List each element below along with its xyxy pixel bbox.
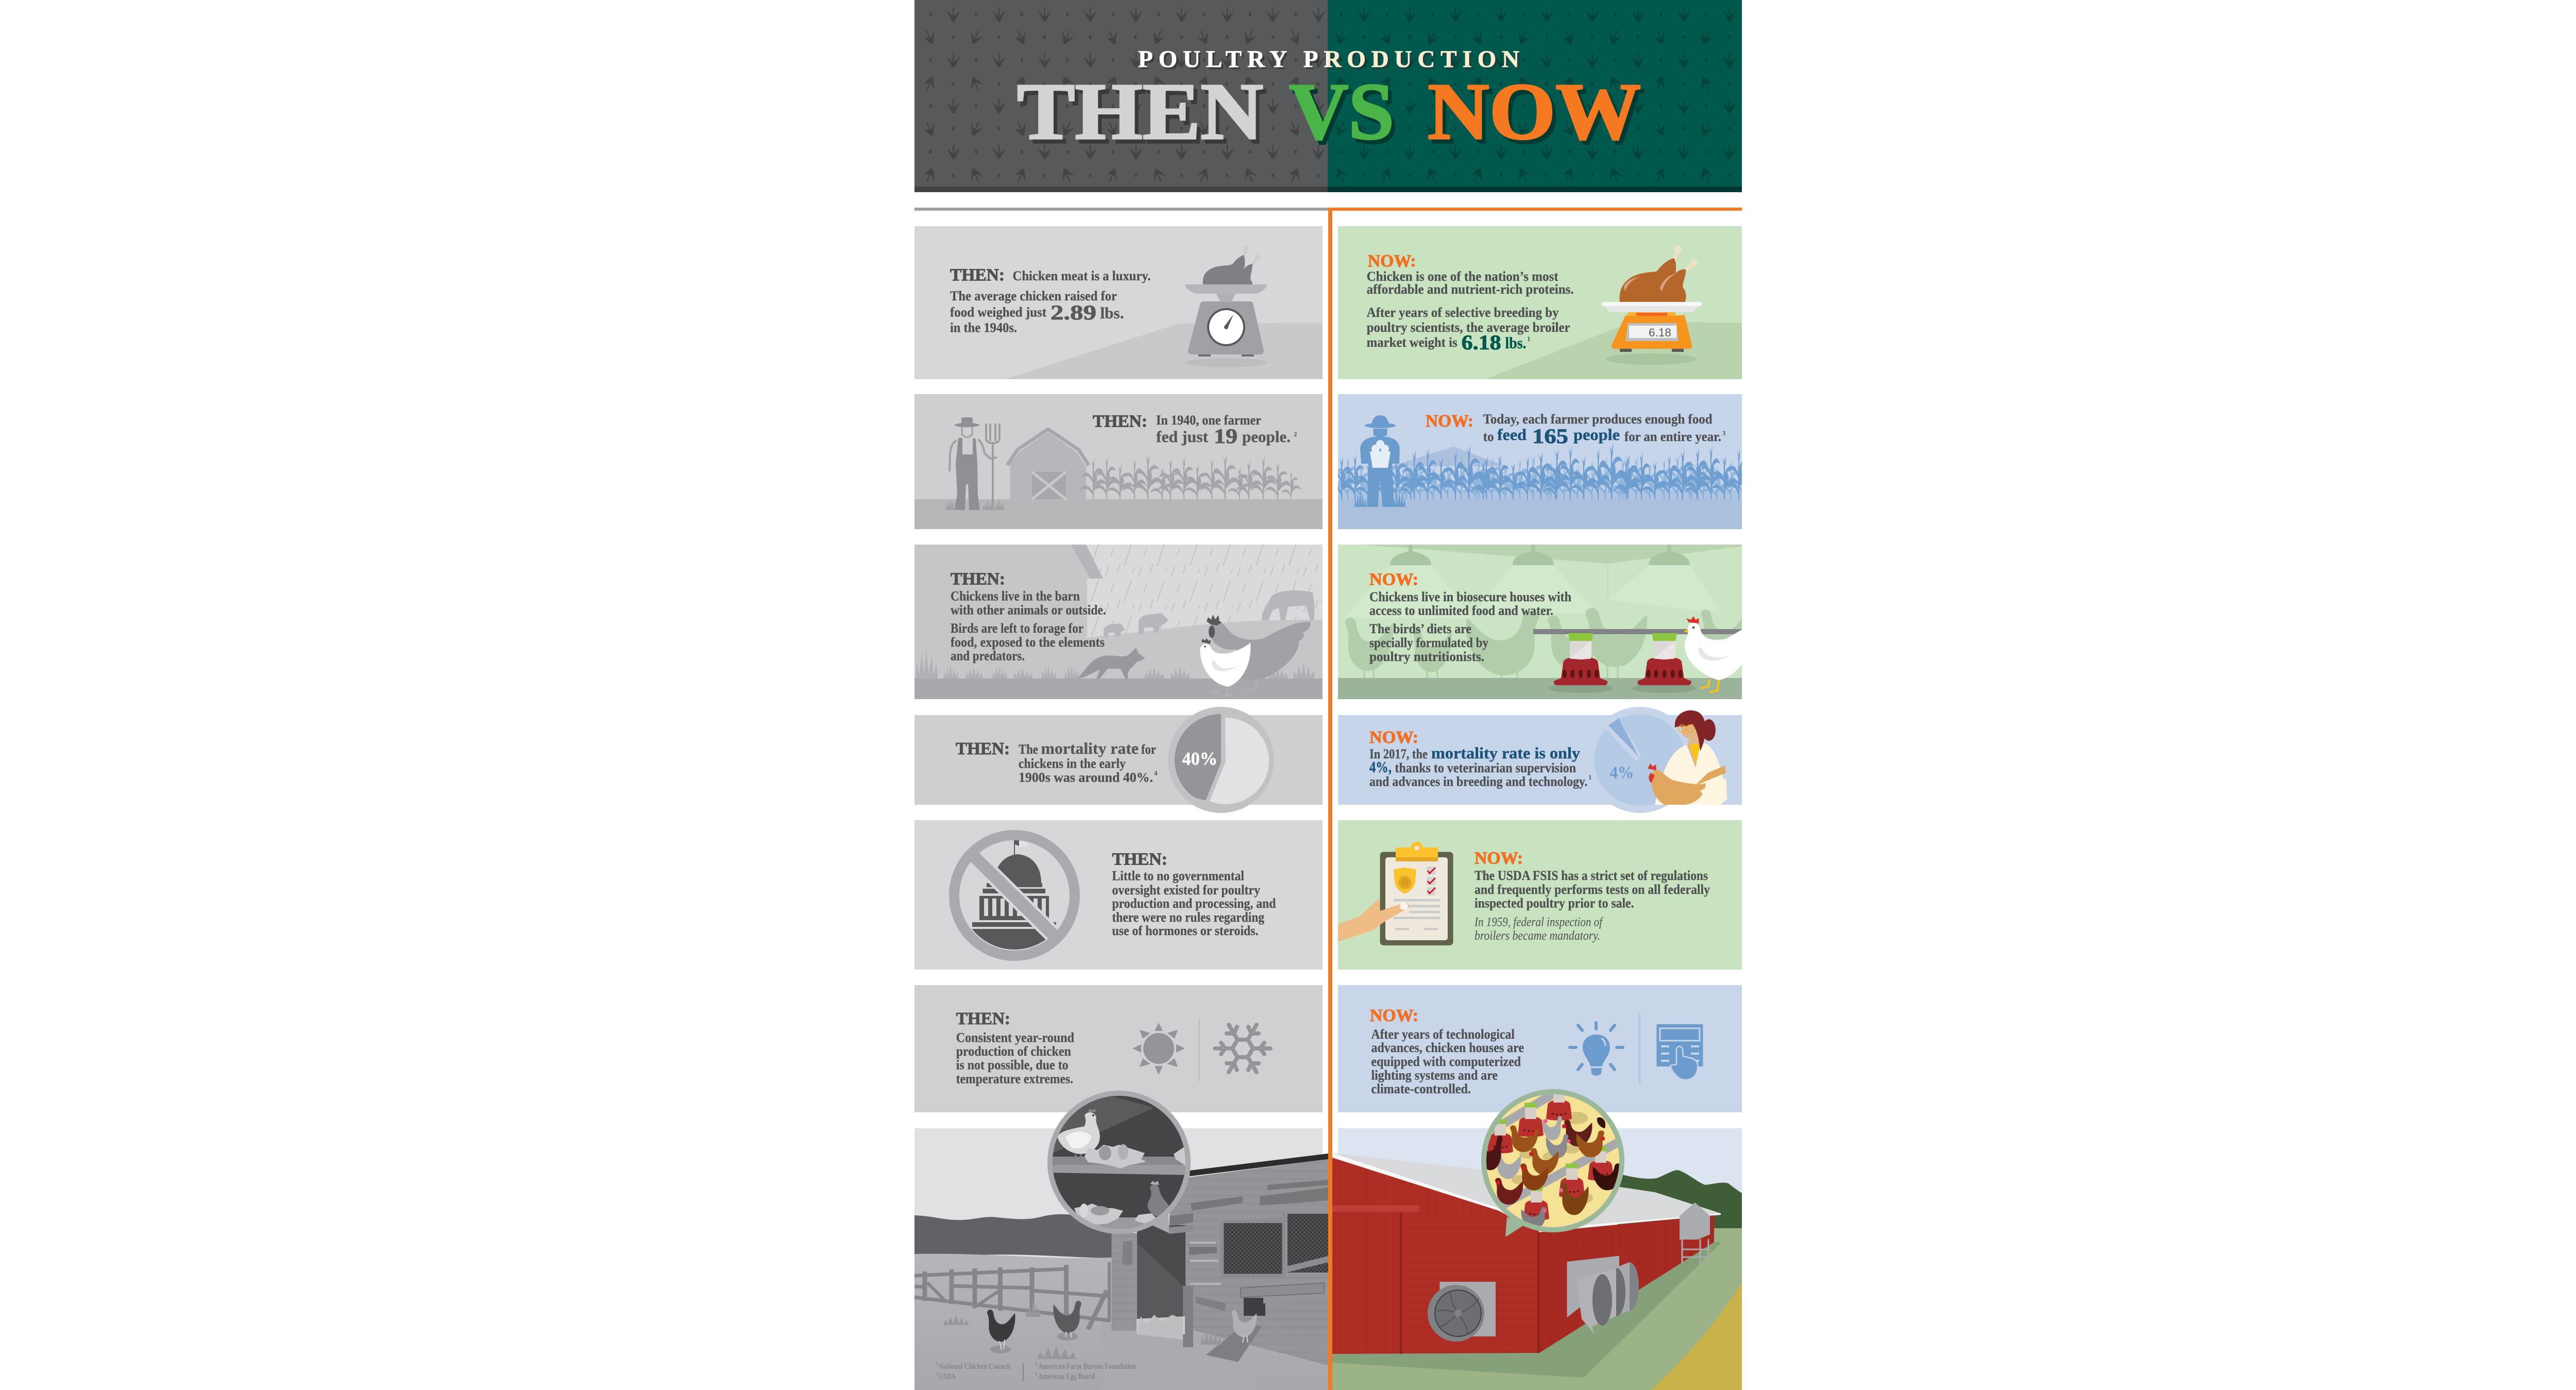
title: then vs now: THEN — [1017, 66, 1263, 156]
text: now government oversight — [1474, 849, 1710, 943]
text: now technology: climate-controlled. — [1371, 1081, 1471, 1096]
lower hen — [1147, 1181, 1171, 1217]
top rules — [914, 208, 1742, 211]
title: then vs now: THEN — [1021, 71, 1267, 160]
text: then government oversight: use of hormones or steroids. — [1112, 923, 1258, 938]
text: then mortality: THEN: — [956, 739, 1010, 758]
text: now government oversight: The USDA FSIS has a strict set of regulations — [1475, 868, 1708, 883]
feeders — [1554, 633, 1691, 685]
icon: clipboard with inspector badge — [1338, 842, 1453, 945]
text: now farmer: 165 — [1532, 425, 1568, 448]
text: then weight: food weighed just — [950, 305, 1046, 319]
coop lower boards and hole — [1244, 1298, 1265, 1316]
coop broken planks — [1122, 1180, 1328, 1311]
text: now technology: NOW: — [1370, 1006, 1418, 1025]
coop windows — [1222, 1223, 1284, 1276]
sources footnotes — [936, 1361, 1136, 1381]
rainy sky — [1086, 545, 1323, 638]
text: now mortality: 4%, — [1369, 758, 1392, 776]
text: then seasons: is not possible, due to — [956, 1058, 1069, 1073]
text: now farmer: people — [1573, 426, 1620, 444]
text: now living conditions: access to unlimited food and water. — [1369, 603, 1553, 618]
panel: then barn scene — [914, 1128, 1333, 1390]
text: now weight: lbs. — [1505, 334, 1526, 352]
ceiling — [1360, 545, 1742, 564]
text: then government oversight: THEN: — [1112, 850, 1167, 869]
text: now government oversight: broilers became mandatory. — [1475, 929, 1600, 943]
text: now government oversight: and frequently performs tests on all federally — [1475, 882, 1710, 897]
barn roof edge — [1071, 545, 1103, 579]
feed line pipe — [1533, 629, 1742, 634]
text: now living conditions: poultry nutritionists. — [1369, 649, 1484, 664]
grass — [916, 649, 1315, 679]
panel: now mortality — [1338, 707, 1742, 813]
text: then mortality: mortality rate — [1041, 739, 1139, 757]
upper nest — [1084, 1144, 1188, 1168]
feed silo — [1680, 1202, 1710, 1264]
text: then mortality: 4 — [1154, 769, 1158, 777]
coop building — [1112, 1154, 1328, 1365]
text: now technology: advances, chicken houses are — [1371, 1040, 1524, 1055]
text: now government oversight: inspected poultry prior to sale. — [1475, 895, 1634, 910]
text: now living conditions: specially formulated by — [1369, 635, 1488, 650]
text: then mortality: chickens in the early — [1019, 756, 1126, 771]
text: then weight: 2.89 — [1050, 301, 1096, 324]
title: then vs now: NOW — [1431, 71, 1645, 160]
ramp — [1206, 1325, 1262, 1362]
divider — [1638, 1014, 1640, 1084]
tunnel fan stack — [1567, 1256, 1639, 1334]
subtitle: poultry production: POULTRY PRODUCTION — [1138, 46, 1519, 73]
text: then weight — [950, 266, 1151, 335]
sources footnotes: 3 — [1035, 1361, 1038, 1366]
text: now farmer: for an entire year. — [1624, 429, 1721, 444]
sources footnotes: 4 — [1035, 1371, 1038, 1377]
chicken flock — [1478, 1116, 1621, 1228]
icon: light bulb — [1570, 1023, 1623, 1076]
text: then living conditions: Chickens live in the barn — [951, 589, 1080, 604]
text: now farmer — [1426, 412, 1726, 448]
icon: digital scale with roast chicken — [1602, 246, 1702, 365]
floor shadows — [1512, 1112, 1593, 1204]
header banner — [914, 0, 1742, 192]
white hen — [1200, 638, 1250, 696]
text: now living conditions: Chickens live in biosecure houses with — [1369, 589, 1571, 604]
text: now weight: After years of selective breeding by — [1367, 305, 1559, 320]
text: then living conditions: food, exposed to the elements — [951, 635, 1105, 650]
callout bubble: old coop nests — [1046, 1087, 1195, 1236]
panel: then weight — [914, 226, 1323, 379]
sources footnotes: American Egg Board — [1038, 1372, 1095, 1381]
panel: now government oversight — [1338, 820, 1742, 970]
text: then seasons: temperature extremes. — [956, 1071, 1073, 1086]
callout bubble: modern house chickens — [1478, 1086, 1628, 1237]
panel: now farmer — [1338, 394, 1742, 529]
text: then weight: in the 1940s. — [950, 320, 1017, 335]
fence — [914, 1262, 1109, 1329]
text: then government oversight: Little to no governmental — [1112, 869, 1244, 884]
background animals — [1104, 590, 1314, 637]
ground chickens — [987, 1301, 1257, 1353]
icon: farmer with pitchfork — [945, 417, 1004, 510]
text: then living conditions: with other animals or outside. — [951, 603, 1106, 617]
title: then vs now — [1017, 66, 1645, 160]
barn gable wall — [1332, 1158, 1539, 1354]
text: now farmer: NOW: — [1426, 412, 1473, 431]
text: now weight: affordable and nutrient-rich proteins. — [1367, 282, 1574, 297]
fox — [1078, 648, 1145, 679]
text: now government oversight: NOW: — [1475, 849, 1523, 868]
text: now weight: 6.18 — [1462, 331, 1501, 354]
icon: farmer with eggs — [1354, 415, 1405, 507]
text: then mortality: 1900s was around 40%. — [1019, 770, 1153, 785]
text: now mortality: mortality rate is only — [1431, 744, 1581, 762]
text: then farmer: fed just — [1156, 428, 1209, 446]
text: now weight — [1367, 252, 1574, 354]
text: now government oversight: In 1959, federal inspection of — [1474, 915, 1604, 929]
text: now weight: NOW: — [1368, 252, 1416, 271]
text: now mortality: and advances in breeding and technology. — [1369, 774, 1588, 789]
panel: then living conditions — [914, 545, 1323, 699]
text: then farmer: people. — [1242, 428, 1291, 446]
title: then vs now: VS — [1293, 71, 1398, 160]
text: then living conditions: THEN: — [951, 570, 1005, 589]
panel: then government oversight — [914, 820, 1323, 970]
panel: now barn scene — [1332, 1128, 1742, 1390]
text: now mortality — [1369, 728, 1592, 789]
text: now mortality: NOW: — [1369, 728, 1418, 747]
icon: barn — [1007, 429, 1089, 499]
lower nest — [1074, 1203, 1157, 1225]
text: now mortality: In 2017, the — [1369, 747, 1428, 761]
text: then seasons: THEN: — [956, 1009, 1010, 1028]
text: now technology — [1370, 1006, 1524, 1096]
text: now weight: market weight is — [1367, 335, 1458, 350]
icon: digital scale with roast chicken: 6.18 — [1649, 326, 1671, 339]
panel: then farmer — [914, 394, 1323, 529]
text: then seasons: production of chicken — [956, 1044, 1071, 1059]
hanging lamps — [1390, 545, 1690, 565]
text: then mortality: The — [1019, 742, 1038, 757]
text: then weight: The average chicken raised for — [950, 289, 1117, 303]
text: then mortality — [956, 739, 1158, 785]
text: now living conditions — [1369, 570, 1571, 664]
text: now technology: After years of technological — [1371, 1027, 1515, 1042]
field of grain — [1651, 1282, 1742, 1390]
panel: now weight — [1338, 226, 1742, 379]
icon: veterinarian holding chicken — [1648, 710, 1727, 805]
pie chart: 4 percent: 4% — [1609, 764, 1634, 783]
divider — [1198, 1018, 1200, 1081]
icon: snowflake — [1215, 1025, 1270, 1072]
text: now technology: equipped with computerized — [1371, 1054, 1521, 1069]
icon: kitchen scale with chicken — [1185, 245, 1267, 367]
subtitle: poultry production: POULTRY PRODUCTION — [1140, 48, 1521, 75]
text: then government oversight: production and processing, and — [1112, 896, 1276, 911]
icon: corn field — [1079, 454, 1301, 499]
text: then government oversight: oversight existed for poultry — [1112, 883, 1260, 897]
icon: control panel touch screen — [1656, 1024, 1703, 1080]
text: now technology: lighting systems and are — [1371, 1067, 1498, 1083]
text: then government oversight: there were no rules regarding — [1112, 910, 1264, 925]
text: now living conditions: NOW: — [1369, 570, 1418, 589]
text: now farmer: feed — [1497, 426, 1527, 444]
barn shadow — [1332, 1242, 1722, 1378]
icon: capitol with prohibition sign — [954, 835, 1075, 956]
text: now weight: poultry scientists, the average broiler — [1367, 320, 1570, 335]
text: then farmer — [1093, 412, 1297, 448]
panel: now technology — [1338, 985, 1742, 1112]
text: then farmer: 19 — [1214, 425, 1238, 448]
chick feeders — [1546, 1086, 1572, 1121]
text: now living conditions: The birds’ diets are — [1369, 621, 1471, 636]
text: now weight: 1 — [1527, 335, 1530, 343]
icon: sun — [1132, 1023, 1185, 1075]
sources footnotes: USDA — [939, 1372, 956, 1381]
feed pipes — [1492, 1092, 1556, 1131]
grass tufts — [943, 1299, 1333, 1359]
panel: now living conditions — [1338, 545, 1746, 699]
white hen — [1684, 616, 1742, 692]
sources footnotes: 2 — [936, 1371, 939, 1377]
shelves — [1046, 1157, 1195, 1165]
text: then farmer: In 1940, one farmer — [1156, 413, 1261, 428]
text: then seasons — [956, 1009, 1074, 1086]
panel: then seasons — [914, 985, 1323, 1112]
text: now mortality: thanks to veterinarian supervision — [1395, 760, 1576, 775]
text: then living conditions: Birds are left to forage for — [951, 621, 1083, 636]
title: then vs now: VS — [1289, 66, 1394, 156]
text: now mortality: 1 — [1588, 773, 1592, 781]
barn side wall — [1538, 1215, 1714, 1353]
barn roof — [1332, 1153, 1721, 1225]
hen silhouettes — [1345, 608, 1746, 678]
pie chart: 40 percent — [1168, 707, 1274, 813]
text: then farmer: 2 — [1294, 430, 1297, 438]
exhaust fan square — [1428, 1282, 1496, 1342]
text: then mortality: for — [1141, 742, 1156, 757]
icon: dense corn field — [1338, 443, 1742, 499]
sources footnotes: American Farm Bureau Foundation — [1038, 1362, 1136, 1371]
text: then living conditions: and predators. — [951, 648, 1025, 663]
text: then living conditions — [951, 570, 1106, 663]
text: now farmer: 3 — [1722, 429, 1726, 437]
text: then farmer: THEN: — [1093, 412, 1147, 431]
hills — [914, 1214, 1123, 1258]
text: then weight: lbs. — [1100, 304, 1124, 322]
rooster — [1207, 615, 1311, 690]
text: now farmer: Today, each farmer produces enough food — [1483, 412, 1713, 427]
upper hen — [1057, 1109, 1100, 1159]
text: then seasons: Consistent year-round — [956, 1030, 1074, 1045]
pie chart: 40 percent: 40% — [1182, 749, 1217, 769]
light cones and wall — [1345, 565, 1597, 618]
field — [914, 1254, 1328, 1390]
text: now farmer: to — [1483, 429, 1494, 444]
title: then vs now: NOW — [1428, 66, 1641, 156]
sources footnotes: National Chicken Council — [939, 1362, 1011, 1371]
sources footnotes: 1 — [936, 1361, 939, 1366]
text: then weight: Chicken meat is a luxury. — [1013, 268, 1151, 283]
center divider line — [1328, 208, 1332, 1390]
text: now weight: Chicken is one of the nation’s most — [1367, 269, 1558, 284]
panel: then mortality — [914, 707, 1323, 813]
hills — [1618, 1170, 1742, 1236]
ground — [1332, 1228, 1742, 1390]
pie chart: 4 percent — [1587, 707, 1693, 813]
text: then weight: THEN: — [950, 266, 1005, 284]
text: then government oversight — [1112, 850, 1276, 938]
